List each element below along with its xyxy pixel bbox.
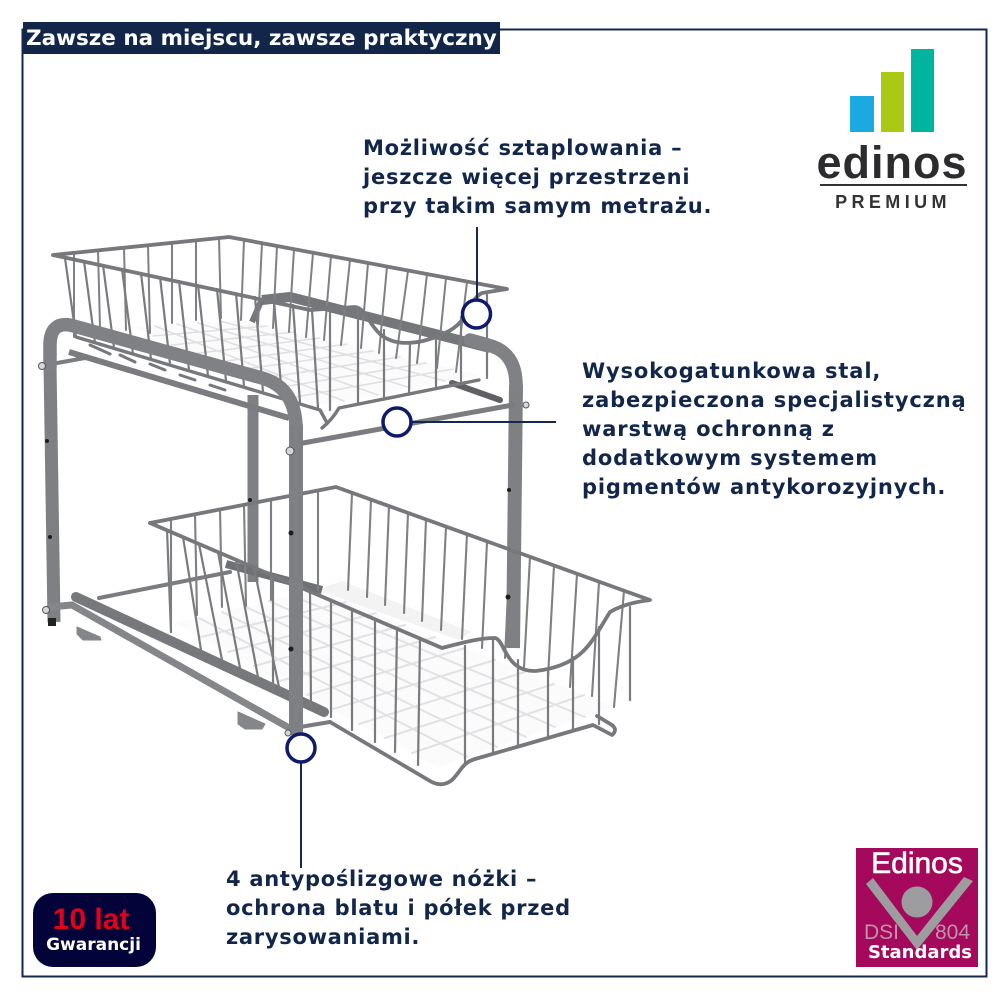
text: feet callout: ochrona blatu i półek przed (226, 896, 571, 920)
text: feet callout: zarysowaniami. (226, 925, 420, 949)
frame bolts (38, 362, 529, 736)
frame adjustment holes (45, 439, 511, 652)
badge: Edinos DSI 804 standards: Edinos (871, 847, 963, 880)
upper cross bars behind frame (57, 352, 513, 443)
text: feet callout: 4 antypoślizgowe nóżki – (226, 867, 537, 891)
text: stacking callout: przy takim samym metrażu. (363, 194, 712, 218)
text: steel callout: Wysokogatunkowa stal, (582, 359, 881, 383)
lower basket front wires (167, 530, 630, 765)
front upright of lower tier (289, 425, 303, 735)
lower basket rear wires (171, 490, 624, 707)
upper basket front wires (65, 258, 487, 410)
main tubular frame (50, 325, 516, 425)
lower basket rim and bottom frame (150, 487, 650, 784)
badge: Edinos DSI 804 standards (856, 847, 978, 967)
rear uprights (50, 364, 516, 648)
upper basket bottom frame (76, 337, 479, 428)
product illustration: two-tier wire basket rack (38, 237, 650, 784)
upper basket rim (53, 237, 507, 343)
text: steel callout: warstwą ochronną z (582, 417, 835, 441)
text: stacking callout: Możliwość sztaplowania – (363, 136, 682, 160)
badge: Edinos DSI 804 standards: Standards (868, 942, 972, 963)
badge: 10 year warranty (33, 893, 156, 967)
callout marker: feet (287, 734, 315, 868)
logo: edinos premium (816, 49, 968, 212)
badge: Edinos DSI 804 standards: DSI (864, 921, 899, 944)
badge: Edinos DSI 804 standards: 804 (935, 921, 970, 944)
title banner: Zawsze na miejscu, zawsze praktyczny (26, 26, 497, 51)
callout marker: steel (383, 408, 556, 436)
text: steel callout: zabezpieczona specjalistyczną (582, 388, 967, 412)
callout marker: stacking (462, 227, 490, 328)
text: stacking callout: jeszcze więcej przestrzeni (362, 165, 690, 189)
upper basket white floor with grid (133, 320, 479, 407)
lower basket white floor with grid (175, 581, 614, 767)
rear frame bar behind upper basket (252, 297, 490, 348)
text: steel callout: dodatkowym systemem (582, 446, 878, 470)
badge: 10 year warranty: Gwarancji (46, 935, 141, 955)
badge: 10 year warranty: 10 lat (53, 903, 129, 936)
upper basket rear wires (74, 238, 467, 372)
logo: edinos premium: edinos (816, 137, 968, 188)
text: steel callout: pigmentów antykorozyjnych. (582, 475, 946, 499)
logo: edinos premium: PREMIUM (835, 192, 951, 212)
base frame, rails and tabs (50, 564, 330, 729)
